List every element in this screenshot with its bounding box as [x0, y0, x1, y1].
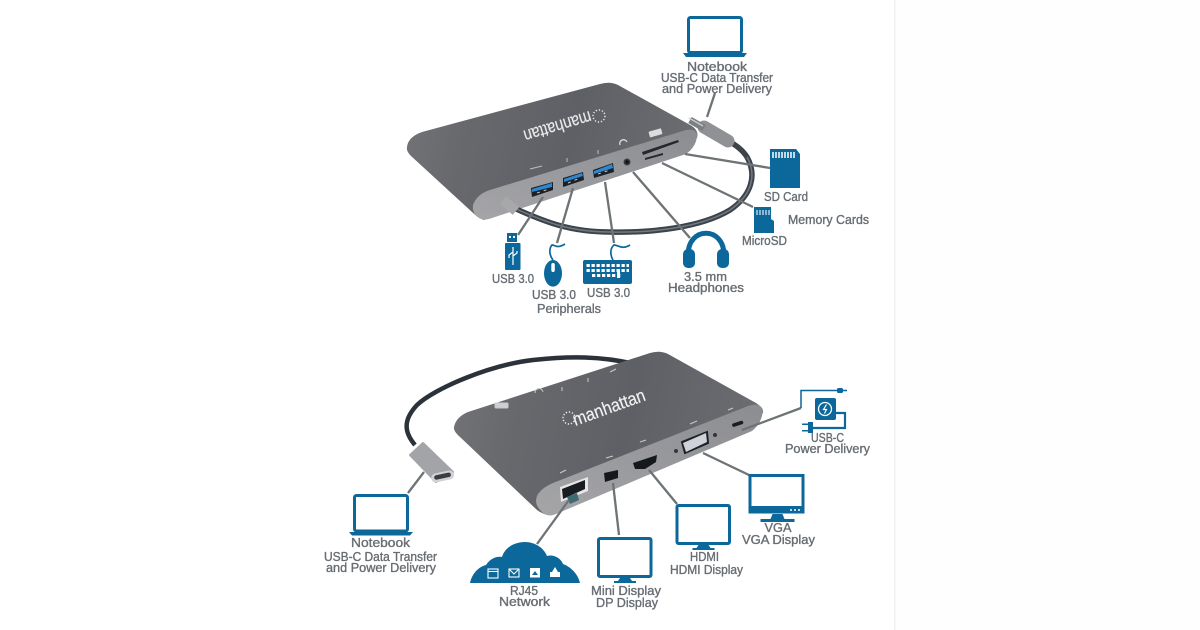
panel: top dock view [407, 18, 869, 316]
port: Mini DisplayPort [604, 470, 618, 482]
logo: manhattan: manhattan [570, 385, 648, 430]
label: USB 3.0 peripherals [532, 288, 601, 316]
cable: top dock [503, 118, 752, 232]
label: headphones: 3.5 mm [684, 270, 727, 284]
label: notebook [324, 536, 437, 575]
icon: SD card [770, 149, 800, 188]
label: USB-C power delivery: Power Delivery [785, 442, 871, 456]
port icons: top dock [530, 128, 663, 169]
label: HDMI [670, 550, 744, 577]
label: USB 3.0 peripherals: USB 3.0 [532, 288, 576, 302]
label: USB 3.0 keyboard: USB 3.0 [587, 286, 630, 300]
label: notebook: Notebook [687, 60, 748, 74]
icon: keyboard [583, 245, 632, 284]
label: notebook: Notebook [351, 536, 411, 550]
label: USB-C power delivery: USB-C [811, 431, 844, 445]
port icons: bottom dock [495, 369, 733, 473]
label: RJ45 network: Network [499, 595, 551, 609]
panel: bottom dock view [324, 352, 871, 610]
ports: card slots [642, 140, 679, 160]
icon: mouse [544, 244, 565, 287]
label: notebook: and Power Delivery [326, 561, 437, 575]
label: notebook: USB-C Data Transfer [324, 550, 437, 564]
ports: USB 3.0 [531, 163, 614, 197]
label: VGA: VGA Display [742, 533, 816, 547]
icon: headphones [683, 233, 729, 268]
icon: monitor mini display [598, 538, 651, 583]
label: notebook: and Power Delivery [662, 82, 773, 96]
label: USB 3.0 peripherals: Peripherals [537, 302, 601, 316]
label: SD card: SD Card [764, 190, 808, 204]
label: memory cards: Memory Cards [788, 213, 869, 227]
label: USB-C power delivery [785, 431, 871, 456]
port: VGA [674, 432, 717, 453]
icon: notebook [683, 18, 747, 57]
icon: monitor HDMI [677, 506, 730, 550]
label: RJ45 network: RJ45 [510, 584, 538, 598]
label: RJ45 network [499, 584, 551, 609]
connector lines: top dock [518, 93, 770, 243]
icon: USB-C power delivery [801, 388, 847, 433]
device: top dock [407, 83, 697, 220]
label: HDMI: HDMI [690, 550, 719, 564]
label: mini display [591, 584, 662, 610]
port: RJ45 [560, 477, 588, 504]
logo: manhattan: manhattan [521, 107, 594, 146]
label: mini display: Mini Display [591, 584, 662, 598]
port: USB-C [732, 420, 744, 427]
logo: manhattan [521, 107, 605, 146]
icon: cloud network [470, 542, 580, 583]
label: headphones: Headphones [668, 281, 744, 295]
label: mini display: DP Display [596, 596, 659, 610]
connector: bottom USB-C plug [410, 443, 455, 483]
icon: USB stick [505, 233, 520, 270]
label: notebook: USB-C Data Transfer [661, 71, 773, 85]
icon: microSD [754, 207, 774, 233]
label: VGA [742, 521, 816, 547]
label: microSD: MicroSD [742, 234, 787, 248]
label: HDMI: HDMI Display [670, 563, 744, 577]
label: VGA: VGA [764, 521, 792, 535]
port: HDMI [633, 455, 657, 469]
label: headphones [668, 270, 744, 295]
label: notebook [661, 60, 773, 96]
connector lines: bottom dock [408, 408, 801, 544]
device: bottom dock [454, 352, 763, 515]
cable: bottom dock [407, 357, 635, 445]
port: audio jack [624, 158, 630, 166]
icon: notebook [349, 496, 413, 536]
icon: monitor VGA [748, 476, 804, 522]
label: USB 3.0 stick: USB 3.0 [492, 272, 534, 286]
